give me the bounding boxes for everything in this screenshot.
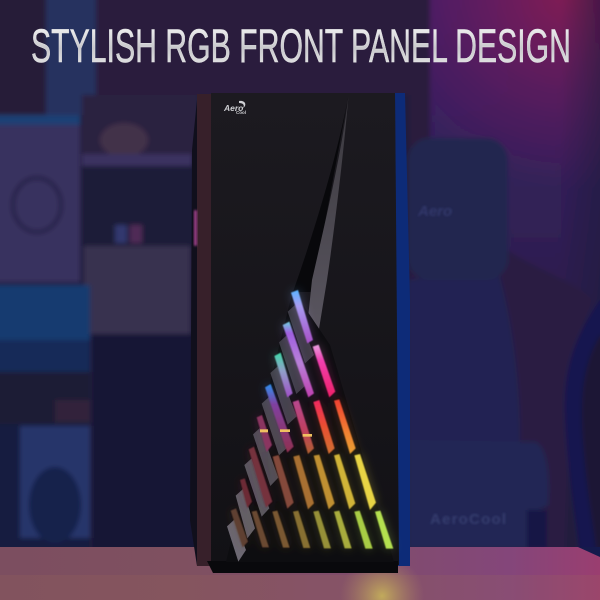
left side dark edge <box>190 100 197 566</box>
boxes on shelf <box>84 246 190 334</box>
grey facet <box>308 96 348 335</box>
RGB light slats <box>231 290 393 549</box>
chair back <box>408 270 520 545</box>
framed poster <box>0 122 80 282</box>
front panel slats <box>227 290 393 562</box>
left brick wall <box>0 0 45 120</box>
case front panel <box>211 93 399 565</box>
case base <box>207 561 398 573</box>
lower poster <box>0 424 90 549</box>
blue book <box>0 285 90 340</box>
chair logo seat: AeroCool <box>430 511 506 528</box>
Aerocool logo on case: Cool <box>236 110 246 115</box>
poster top border <box>0 115 80 125</box>
chair wing <box>410 245 592 560</box>
poster emblem <box>13 178 61 232</box>
case left side panel <box>197 94 212 566</box>
table <box>0 547 600 600</box>
dark shelf base <box>92 334 197 549</box>
chair headrest <box>408 138 508 280</box>
upper wall brick <box>96 0 431 95</box>
glossy black facet <box>293 96 348 292</box>
grey slats <box>227 305 314 562</box>
chair logo headrest: Aero <box>417 203 452 220</box>
shelf background <box>82 95 197 157</box>
chair right arm <box>565 300 600 560</box>
right purple wall <box>429 0 600 320</box>
case right side panel <box>395 93 410 566</box>
Aerocool logo on case <box>223 101 246 115</box>
Aerocool logo on case: Aero <box>223 103 243 113</box>
under shelf <box>82 166 192 246</box>
shelf toy <box>100 123 148 157</box>
triangle shadow <box>226 290 394 562</box>
coloured chevrons <box>115 225 127 243</box>
wall patch: blue <box>46 0 96 115</box>
shelf <box>82 154 192 166</box>
reflections <box>260 429 312 437</box>
PC case <box>190 93 410 573</box>
dark book <box>0 372 90 424</box>
left side pink fan glow <box>194 210 197 246</box>
chair seat <box>408 440 549 548</box>
